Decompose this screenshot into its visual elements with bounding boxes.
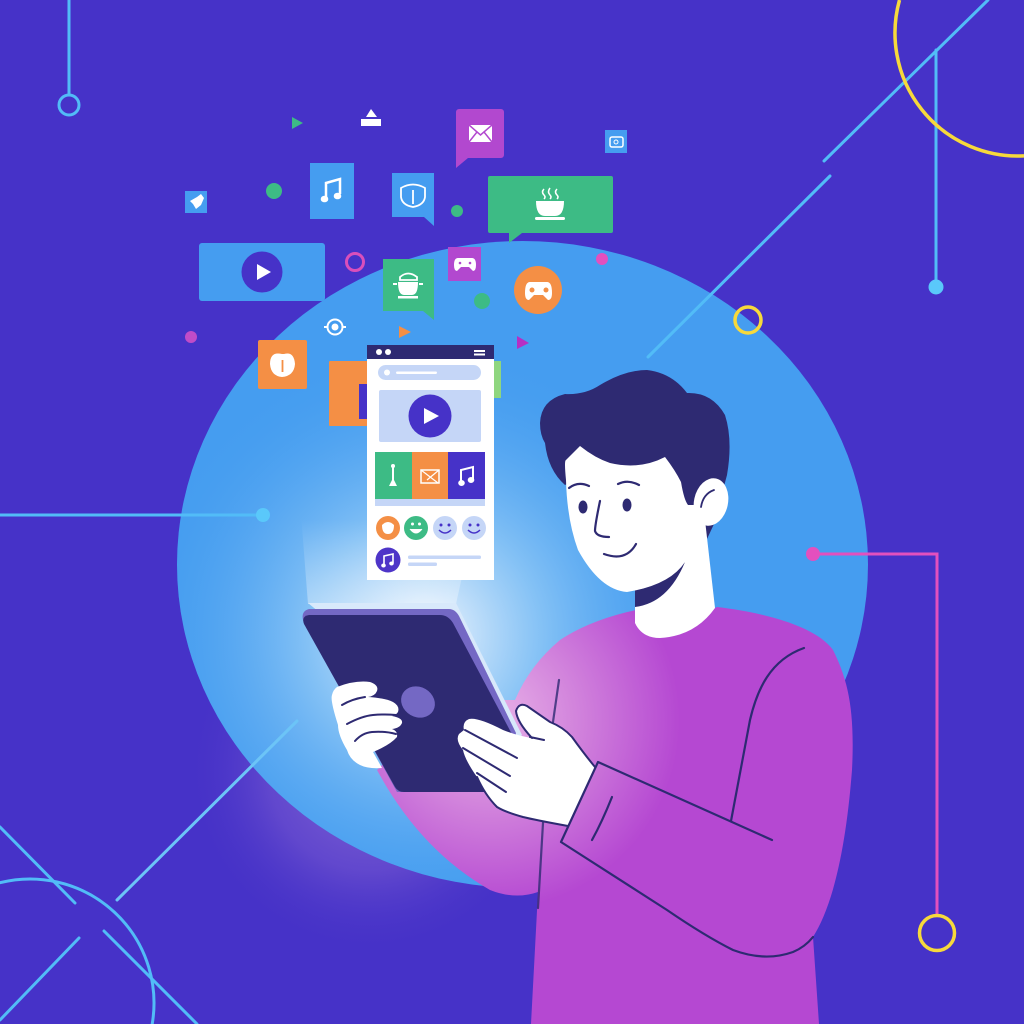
music list row: [376, 548, 481, 572]
tile behind phone: orange: [329, 361, 369, 426]
tablet: [303, 603, 522, 792]
app tiles row: [375, 452, 485, 506]
sweater body: [377, 607, 853, 1024]
neck: [635, 520, 715, 638]
tablet face: [303, 615, 515, 792]
ear: [689, 475, 733, 529]
connector: top right diagonals and pin: [648, 0, 988, 357]
person: [377, 370, 853, 1024]
dot: green: [266, 183, 282, 199]
connector: left line with node: [0, 508, 270, 522]
icon: eject: [361, 109, 381, 126]
connector: pink line with yellow ring: [806, 547, 954, 950]
panel header bar: [367, 345, 494, 359]
icon: target: [324, 320, 346, 334]
search pill: [378, 365, 481, 380]
connector: top left pin: [59, 0, 79, 115]
facial features: [569, 482, 639, 556]
icon: small blue screen: [605, 130, 627, 153]
yellow arc top right: [895, 0, 1024, 156]
left hand: [332, 682, 402, 768]
tablet side edge: [303, 609, 516, 792]
ring: pink: [346, 254, 364, 270]
light beam from tablet: [296, 450, 490, 604]
large blue circle with glow: [177, 241, 868, 886]
dot: purple: [185, 331, 197, 343]
triangle: purple: [517, 336, 529, 349]
tablet highlight edge: [308, 603, 522, 760]
floating icons: [185, 109, 627, 426]
yellow ring: [735, 307, 761, 333]
connector: bottom left lines and arc: [0, 721, 297, 1024]
triangle: orange: [399, 326, 411, 338]
icon: orange gamepad: [514, 266, 562, 314]
icon: video card: [199, 243, 325, 301]
face: [565, 446, 705, 592]
right hand: [458, 705, 595, 827]
tablet button: [395, 680, 441, 724]
video player card: [379, 390, 481, 442]
icon: green bubble: [383, 259, 434, 320]
tile behind phone: green: [492, 361, 501, 398]
sweater seams: [538, 648, 804, 908]
outer glow below circle: [185, 585, 555, 955]
dot: small green: [451, 205, 463, 217]
dot: green mid: [474, 293, 490, 309]
hair: [540, 370, 730, 520]
icon: shield bubble: [392, 173, 434, 226]
phone interface panel: [367, 345, 494, 580]
icon: music tile: [310, 163, 354, 219]
icon: orange heart tile: [258, 340, 307, 389]
icon: small blue with white shape: [185, 191, 207, 213]
panel body: [367, 345, 494, 580]
icon: purple gamepad tile: [448, 247, 481, 281]
triangle: green: [292, 117, 303, 129]
neck shadow: [635, 562, 685, 607]
icon: coffee bubble: [488, 176, 613, 243]
emoji row: [376, 516, 486, 540]
icon: mail bubble: [456, 109, 504, 168]
hair back piece: [700, 520, 714, 539]
sleeve cuff outline: [561, 762, 813, 957]
dot: pink: [596, 253, 608, 265]
